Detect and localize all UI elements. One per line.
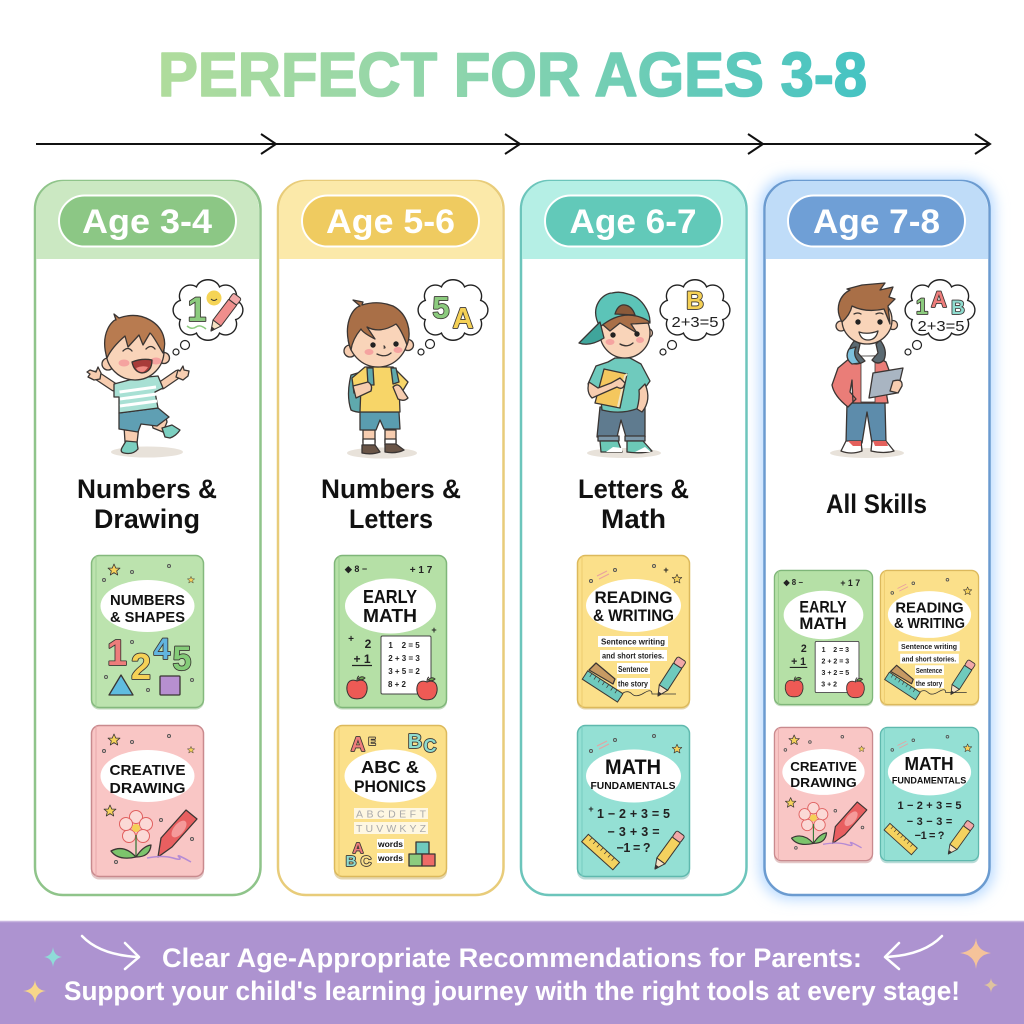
book: Math Fundamentals: −1 = ?	[616, 841, 650, 855]
panel: age 3-4	[35, 181, 260, 895]
thought bubble: letters and sum	[905, 280, 975, 355]
skill heading: Math	[601, 504, 666, 534]
book: Early Math: MATH	[363, 605, 417, 626]
skill heading: Numbers &	[77, 474, 217, 504]
illustration: laughing toddler	[87, 314, 189, 458]
sparkles	[23, 938, 998, 1003]
book: ABC & Phonics: A	[353, 840, 364, 857]
thought bubble: B and sum: B	[686, 287, 704, 315]
book: Math Fundamentals: FUNDAMENTALS	[590, 780, 676, 792]
book: Early Math: 3 + 5 = 2	[388, 667, 420, 676]
skill heading: Letters	[349, 504, 433, 534]
book: Early Math: 2 + 3 = 3	[388, 654, 420, 663]
title: PERFECT FOR AGES 3-8	[158, 41, 867, 110]
book: Math Fundamentals (small): − 3 − 3 =	[907, 816, 952, 828]
skill heading: All Skills	[826, 489, 927, 519]
book: ABC & Phonics: ABC &	[361, 757, 419, 777]
panel: age 7-8 (highlighted)	[760, 177, 994, 899]
age badge: Age 5-6	[302, 196, 479, 246]
thought bubble: 5 and A	[418, 280, 488, 355]
book: Math Fundamentals: 1 − 2 + 3 = 5	[597, 807, 670, 821]
book: Reading & Writing: Sentence	[618, 665, 648, 674]
skill heading: Drawing	[94, 504, 200, 534]
age badge: Age 5-6: Age 5-6	[326, 203, 455, 241]
book: ABC & Phonics: B	[408, 731, 422, 753]
book: Reading & Writing (small): Sentence	[916, 668, 942, 675]
book: Early Math: +	[348, 634, 354, 645]
book: ABC & Phonics: E	[368, 736, 376, 748]
book: Numbers & Shapes	[91, 556, 204, 710]
book: Early Math: +	[431, 625, 437, 635]
illustration: boy with backpack	[344, 300, 417, 458]
book: Early Math: 8 + 2	[388, 680, 407, 689]
book: Reading & Writing (small): Sentence writing	[901, 644, 957, 651]
thought bubble: 5 and A: A	[453, 303, 474, 335]
book: Numbers & Shapes: 5	[173, 640, 191, 678]
book: Math Fundamentals (small): FUNDAMENTALS	[892, 775, 966, 785]
book: Numbers & Shapes: 2	[131, 646, 151, 687]
age badge: Age 3-4: Age 3-4	[82, 203, 212, 241]
thought bubble: number and pencil	[173, 280, 243, 355]
book: Early Math (small): 3 + 2 = 5	[822, 670, 849, 677]
book: ABC & Phonics: TUVWKYZ	[356, 823, 427, 835]
book: Early Math: EARLY	[363, 586, 418, 607]
book: Creative Drawing: DRAWING	[110, 780, 186, 797]
book: Math Fundamentals: +	[588, 804, 594, 814]
footer banner	[0, 921, 1024, 1024]
book: Early Math (small): EARLY	[799, 598, 847, 616]
illustration: boy with cap and book	[579, 292, 661, 458]
book: Numbers & Shapes: 4	[154, 633, 171, 666]
book: ABC & Phonics: words	[377, 839, 403, 849]
book: Early Math: + 1 7	[410, 565, 433, 576]
book: Early Math (small)	[774, 570, 873, 706]
book: ABC & Phonics: C	[424, 736, 436, 756]
book: Math Fundamentals: − 3 + 3 =	[608, 825, 660, 839]
book: Creative Drawing (small): DRAWING	[790, 775, 857, 790]
book: Reading & Writing (small): the story	[916, 681, 942, 688]
book: Early Math	[334, 556, 447, 710]
age badge: Age 7-8	[788, 196, 965, 246]
skill heading: Numbers &	[321, 474, 461, 504]
book: Early Math: ◆ 8 −	[344, 564, 367, 574]
book: Early Math (small): + 1 7	[840, 578, 860, 588]
arrow: left	[82, 936, 139, 969]
age badge: Age 6-7	[545, 196, 722, 246]
thought bubble: letters and sum: A	[931, 287, 947, 312]
panel header: age 7-8	[766, 181, 988, 259]
age badge: Age 3-4	[59, 196, 236, 246]
panel header: age 5-6	[279, 181, 502, 259]
book: Early Math: 1 2 = 5	[388, 641, 420, 650]
thought bubble: B and sum	[660, 280, 730, 355]
panel header: age 3-4	[36, 181, 259, 259]
age badge: Age 7-8: Age 7-8	[813, 203, 940, 241]
book: Reading & Writing: READING	[594, 588, 672, 607]
book: Creative Drawing	[91, 726, 204, 880]
skill heading: Letters &	[578, 474, 689, 504]
book: Early Math (small): MATH	[799, 615, 847, 633]
timeline arrow	[36, 134, 990, 154]
panel: age 6-7	[521, 181, 746, 895]
thought bubble: 5 and A: 5	[432, 290, 450, 325]
book: Reading & Writing (small): READING	[895, 599, 964, 616]
book: ABC & Phonics	[334, 726, 447, 880]
book: Reading & Writing: & WRITING	[593, 606, 674, 625]
book: ABC & Phonics: B	[346, 853, 357, 870]
book: ABC & Phonics: A	[351, 734, 365, 756]
book: Early Math (small): 2	[801, 643, 807, 655]
book: Early Math (small): ◆ 8 −	[783, 578, 803, 587]
book: Early Math (small): 1 2 = 3	[822, 647, 849, 654]
book: ABC & Phonics: ABCDEFT	[356, 808, 427, 820]
book: Early Math (small): 3 + 2	[821, 681, 837, 688]
book: Creative Drawing (small)	[774, 727, 873, 863]
book: ABC & Phonics: C	[361, 853, 372, 870]
book: Creative Drawing: CREATIVE	[110, 762, 186, 779]
book: Math Fundamentals (small): −1 = ?	[915, 830, 945, 842]
book: ABC & Phonics: words	[377, 853, 403, 863]
book: Numbers & Shapes: NUMBERS	[110, 593, 185, 609]
thought bubble: letters and sum: B	[951, 298, 965, 319]
panel header: age 6-7	[522, 181, 745, 259]
book: Reading & Writing: +	[663, 565, 669, 575]
book: Math Fundamentals (small): 1 − 2 + 3 = 5	[898, 800, 961, 812]
thought bubble: number and pencil: 1	[188, 291, 206, 329]
book: Early Math (small): + 1	[791, 656, 806, 668]
book: Numbers & Shapes: & SHAPES	[110, 610, 185, 626]
skill heading	[578, 474, 689, 534]
book: Creative Drawing (small): CREATIVE	[790, 759, 857, 774]
book: Reading & Writing (small): & WRITING	[894, 615, 965, 632]
book: Early Math (small): 2 + 2 = 3	[822, 658, 849, 665]
age badge: Age 6-7: Age 6-7	[570, 203, 696, 241]
book: Math Fundamentals (small): MATH	[905, 753, 954, 774]
skill heading	[77, 474, 217, 534]
arrow: right	[885, 936, 942, 969]
book: Reading & Writing: the story	[618, 680, 648, 688]
book: Reading & Writing (small)	[880, 570, 979, 706]
thought bubble: letters and sum: 2+3=5	[918, 319, 964, 335]
thought bubble: letters and sum: 1	[916, 294, 928, 319]
book: Early Math: 2	[365, 637, 372, 651]
banner text	[64, 943, 960, 1006]
panel: age 5-6	[278, 181, 504, 895]
book: Math Fundamentals (small)	[880, 727, 979, 863]
book: Reading & Writing: and short stories.	[602, 652, 664, 660]
book: Reading & Writing (small): and short stories.	[902, 656, 956, 663]
banner text: Clear Age-Appropriate Recommendations for Parents:	[162, 943, 862, 973]
banner text: Support your child's learning journey with the right tools at every stage!	[64, 976, 960, 1006]
book: ABC & Phonics: PHONICS	[354, 777, 426, 796]
book: Reading & Writing: Sentence writing	[601, 638, 665, 646]
skill heading	[321, 474, 461, 534]
book: Math Fundamentals: MATH	[605, 756, 661, 779]
illustration: older boy with tablet	[830, 283, 904, 458]
thought bubble: B and sum: 2+3=5	[672, 314, 718, 331]
book: Numbers & Shapes: 1	[107, 632, 127, 673]
book: Reading & Writing	[577, 556, 690, 710]
book: Early Math: + 1	[353, 652, 371, 666]
book: Math Fundamentals	[577, 726, 690, 880]
